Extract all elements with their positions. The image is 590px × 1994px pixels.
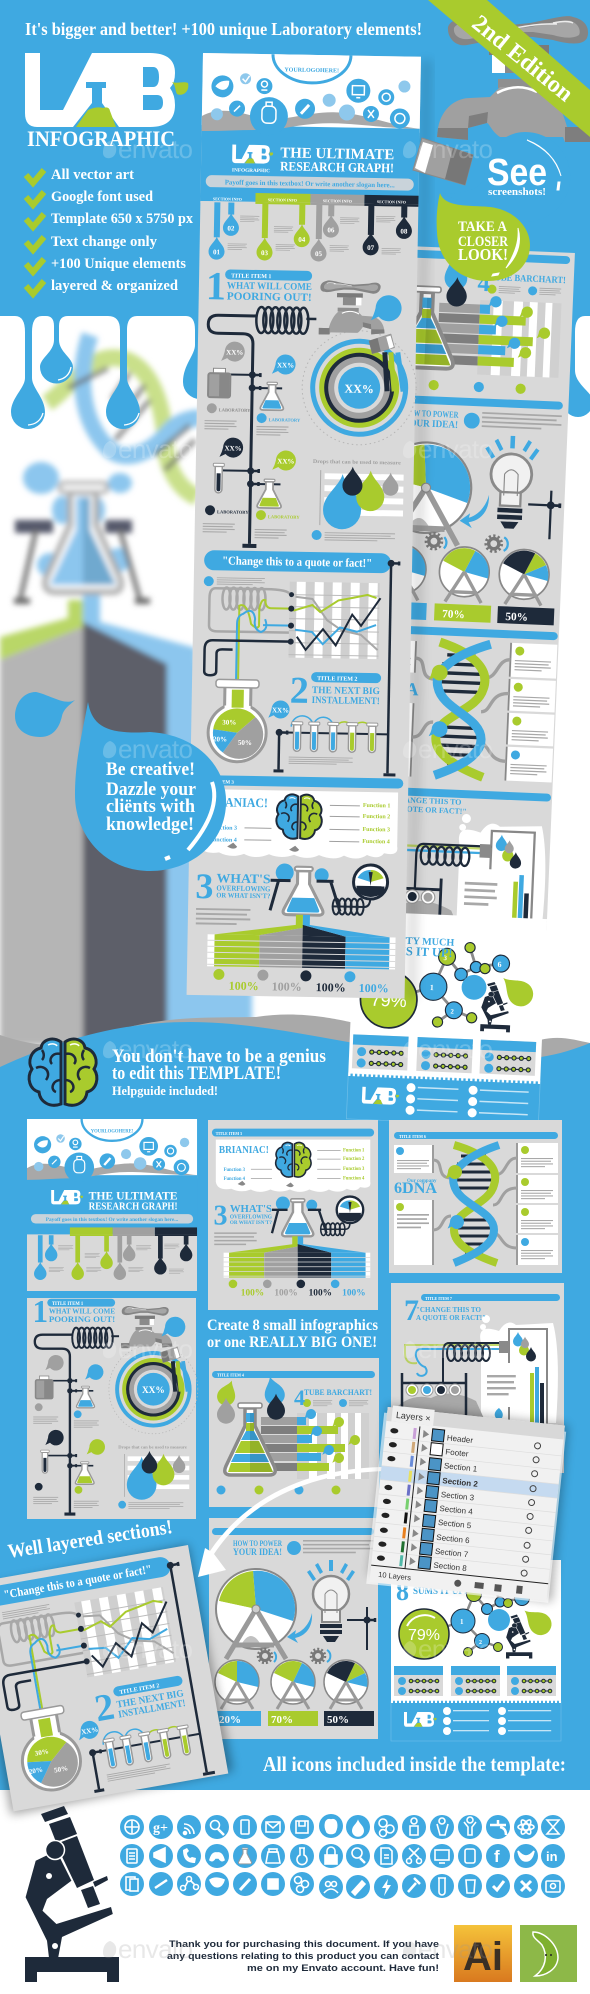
section 5 power your idea: 70% xyxy=(442,608,465,621)
poster section 1: POORING OUT! xyxy=(227,290,312,304)
well layered rotated panel xyxy=(0,1545,228,1811)
create 8 small infographics caption: Create 8 small infographics xyxy=(207,1317,378,1334)
poster section 1 xyxy=(201,263,418,551)
small panel: section 3: Function 4 xyxy=(343,1176,365,1181)
curved white arrow xyxy=(198,1467,385,1577)
small panel: section 3: Function 3 xyxy=(224,1168,246,1173)
poster header section: SECTION INFO xyxy=(377,199,406,205)
infographic wordmark: INFOGRAPHIC xyxy=(27,126,175,151)
genius message: to edit this TEMPLATE! xyxy=(112,1063,281,1084)
poster section 3: Function 3 xyxy=(209,825,237,832)
green 2nd edition ribbon xyxy=(428,0,590,137)
create 8 small infographics caption xyxy=(207,1317,378,1351)
poster section 2: 2 xyxy=(290,670,309,712)
small panel: section 4: 4 xyxy=(294,1385,305,1410)
layer expand triangles xyxy=(409,1430,430,1566)
section 5 power your idea xyxy=(371,394,564,625)
drop label xyxy=(458,219,508,264)
layers count: 10 Layers xyxy=(378,1570,412,1582)
layers tab: Layers × xyxy=(395,1410,431,1423)
poster section 1: LABORATORY xyxy=(217,509,249,515)
poster header section: 01 xyxy=(213,248,221,256)
small panel: section 5: 70% xyxy=(271,1714,293,1726)
creative text: cliënts with xyxy=(106,796,195,817)
envato watermarks on white: envato xyxy=(418,1934,493,1964)
poster section 1: XX% xyxy=(344,382,374,396)
feature list: Google font used xyxy=(51,189,154,205)
poster section 1: LABORATORY xyxy=(268,514,300,520)
well layered rotated panel: 2 xyxy=(92,1686,118,1730)
small panel: section 8: SUMS IT UP! xyxy=(413,1586,467,1596)
section 8 sums it up: PRETTY MUCH xyxy=(379,935,455,949)
small panel: section 5: HOW TO POWER xyxy=(233,1539,282,1548)
small panel: section 3: BRIANIAC! xyxy=(219,1145,269,1156)
poster section 2: 20% xyxy=(213,735,227,744)
gray wave behind blue section xyxy=(0,1015,590,1100)
small panel: section 3 xyxy=(208,1120,378,1310)
envato watermarks on white: envato xyxy=(118,1934,193,1964)
thank you note xyxy=(167,1939,440,1974)
poster section 3: Function 3 xyxy=(362,827,390,833)
feature list: Template 650 x 5750 px xyxy=(51,211,193,227)
section 8 sums it up xyxy=(346,915,547,1127)
thank you note: any questions relating to this product you can contact xyxy=(167,1951,440,1962)
poster section 1: LABORATORY xyxy=(269,417,301,423)
selected row xyxy=(380,1466,559,1498)
poster section 2: XX% xyxy=(272,706,289,715)
layer names: Section 4 xyxy=(439,1504,474,1516)
section 4 tube barchart: 4 xyxy=(477,270,491,297)
poster section 1: Drops that can be used to measure xyxy=(313,459,402,467)
icon glyphs: in xyxy=(546,1849,558,1864)
poster section 3: Function 4 xyxy=(362,839,390,845)
well layered heading: Well layered sections! xyxy=(6,1516,174,1563)
small panel: section 3: Function 3 xyxy=(343,1167,365,1172)
screenshots label: screenshots! xyxy=(488,187,546,198)
poster header section: 06 xyxy=(327,226,335,234)
layer names: Section 5 xyxy=(438,1518,472,1530)
small blue splash drop xyxy=(15,692,75,737)
large faucet xyxy=(437,16,590,142)
well layered rotated panel: 20% xyxy=(28,1766,43,1776)
layer names: Footer xyxy=(445,1447,469,1459)
poster 2 sheet xyxy=(355,245,575,930)
envato watermarks: envato xyxy=(118,1034,193,1064)
poster header section: 03 xyxy=(261,249,269,257)
poster section 3: BRIANIAC! xyxy=(204,794,268,810)
poster 1 sheet xyxy=(187,53,421,999)
poster header section: SECTION INFO xyxy=(323,198,352,204)
large brain icon xyxy=(29,1039,97,1105)
small panel: header: RESEARCH GRAPH! xyxy=(89,1201,178,1212)
feature list: layered & organized xyxy=(51,278,179,294)
section 4 tube barchart: TUBE BARCHART! xyxy=(489,272,566,286)
poster section 3: 3 xyxy=(195,866,214,906)
small panel: section 1: TITLE ITEM 1 xyxy=(52,1302,84,1307)
LAB logo xyxy=(25,53,188,127)
layer color strips xyxy=(399,1428,417,1566)
envato watermarks: envato xyxy=(418,734,493,764)
take a closer look green drop xyxy=(437,193,530,281)
poster header section: THE ULTIMATE xyxy=(280,145,394,163)
poster header section: 04 xyxy=(298,236,306,244)
see screenshots bubble xyxy=(443,132,570,222)
feature list: All vector art xyxy=(51,167,134,183)
small panel: section 3: Function 1 xyxy=(343,1148,365,1153)
feature list: +100 Unique elements xyxy=(51,256,186,272)
section 6 DNA: 6DNA xyxy=(370,677,419,699)
layer names xyxy=(433,1433,483,1573)
drop highlight xyxy=(165,782,214,859)
layers tab xyxy=(391,1406,435,1426)
creative text: Dazzle your xyxy=(106,779,197,800)
layers panel shadow xyxy=(369,1405,568,1602)
icon glyphs: g+ xyxy=(153,1821,168,1836)
small panel: section 4: TITLE ITEM 4 xyxy=(217,1372,244,1378)
drop highlight xyxy=(492,228,520,276)
poster section 2: 30% xyxy=(222,718,236,727)
small panel: section 5: YOUR IDEA! xyxy=(233,1547,282,1557)
layer thumbnails xyxy=(418,1429,445,1569)
small panel: section 8: 1 xyxy=(460,1618,464,1626)
genius message: Helpguide included! xyxy=(112,1083,218,1098)
poster section 2 xyxy=(200,550,399,776)
section 5 power your idea: HOW TO POWER xyxy=(403,407,459,420)
poster section 3: 100% xyxy=(229,979,259,993)
well layered rotated panel: 30% xyxy=(34,1747,49,1758)
small panel: section 3: OR WHAT ISN'T? xyxy=(230,1220,272,1226)
poster header section xyxy=(199,53,421,263)
feature list: Text change only xyxy=(51,234,157,250)
well layered rotated panel: 50% xyxy=(53,1764,69,1775)
envato watermarks: envato xyxy=(118,134,193,164)
poster header section: 02 xyxy=(227,224,235,233)
poster section 3: 100% xyxy=(359,981,389,995)
layer names: Header xyxy=(446,1433,474,1445)
poster section 3: 100% xyxy=(272,979,302,994)
Adobe Illustrator badge xyxy=(454,1925,512,1982)
layer names: Section 3 xyxy=(440,1490,475,1503)
small panel: section 8: 2 xyxy=(479,1640,482,1646)
creative text: knowledge! xyxy=(106,814,194,835)
thank you note: Thank you for purchasing this document. If you have xyxy=(169,1939,439,1950)
icon glyphs xyxy=(125,1817,560,1896)
small panel: section 7 xyxy=(391,1283,564,1473)
poster section 3: Function 4 xyxy=(209,837,237,844)
blue wave section background xyxy=(0,1022,590,1790)
drop label: TAKE A xyxy=(458,219,507,235)
poster section 1: WHAT WILL COME xyxy=(227,280,312,293)
envato watermarks xyxy=(103,134,493,1664)
bubble highlight xyxy=(527,140,561,190)
poster section 1: XX% xyxy=(226,348,243,357)
small panel: section 6 DNA: 6DNA xyxy=(394,1180,437,1197)
well layered rotated panel: TITLE ITEM 2 xyxy=(119,1683,160,1696)
banana mascot badge xyxy=(520,1925,577,1982)
blue top background with drips xyxy=(0,0,590,429)
section 7 quote: A QUOTE OR FACT!" xyxy=(387,804,467,816)
small panel: section 6 DNA: Our company xyxy=(407,1179,437,1184)
section 7 quote xyxy=(360,786,551,946)
creative text xyxy=(106,759,197,835)
faucet spout tip xyxy=(413,138,473,185)
poster 2 behind xyxy=(346,245,575,1127)
small panel: section 3: Function 2 xyxy=(343,1157,365,1162)
section 8 sums it up: 2 xyxy=(450,1009,455,1016)
poster section 2: THE NEXT BIG xyxy=(312,685,380,697)
small panel: section 3: WHAT'S xyxy=(230,1204,272,1215)
poster 1 shadow xyxy=(406,60,432,1000)
small panel: section 3: TITLE ITEM 3 xyxy=(216,1132,242,1136)
small panel: section 8 xyxy=(391,1560,561,1741)
well layered rotated panel: XX% xyxy=(81,1725,99,1736)
poster section 3: Function 2 xyxy=(363,814,390,820)
layers panel xyxy=(366,1405,567,1603)
small panel: section 5: 50% xyxy=(327,1714,349,1726)
section 5 power your idea: YOUR IDEA! xyxy=(402,418,458,431)
envato watermarks: envato xyxy=(118,434,193,464)
layer toolbar buttons xyxy=(454,1579,523,1594)
small panel: section 3: 100% xyxy=(241,1289,264,1299)
small panel: section 3: OVERFLOWING xyxy=(230,1214,272,1220)
envato watermarks: envato xyxy=(118,1334,193,1364)
white bottom section xyxy=(0,1790,590,1994)
small panel: section 1: 1 xyxy=(32,1294,48,1329)
small panel: section 7: TITLE ITEM 7 xyxy=(425,1296,452,1301)
poster header section: SECTION INFO xyxy=(268,197,297,203)
poster header section: 05 xyxy=(315,250,323,258)
envato watermarks: envato xyxy=(418,134,493,164)
small panel: section 1: XX% xyxy=(142,1386,165,1396)
genius message xyxy=(112,1046,326,1098)
blurred laboratory background scene xyxy=(0,335,252,1045)
small panel: section 4: TUBE BARCHART! xyxy=(304,1387,372,1397)
poster section 3: OR WHAT ISN'T? xyxy=(216,891,271,900)
poster section 3: OVERFLOWING xyxy=(216,883,271,893)
envato watermarks: envato xyxy=(418,1034,493,1064)
microscope icon xyxy=(25,1806,119,1982)
genius message: You don't have to be a genius xyxy=(112,1046,326,1067)
layer names: Section 7 xyxy=(435,1547,469,1559)
small panel: header: YOURLOGOHERE! xyxy=(91,1129,134,1134)
poster section 3: Function 1 xyxy=(363,803,390,809)
see label: See xyxy=(487,152,547,194)
poster section 2: INSTALLMENT! xyxy=(312,695,380,707)
envato watermarks on white xyxy=(103,1934,493,1964)
section 7 quote: "CHANGE THIS TO xyxy=(388,795,462,807)
layer names: Section 8 xyxy=(433,1561,468,1573)
thank you note: me on my Envato account. Have fun! xyxy=(247,1963,439,1974)
section 6 DNA xyxy=(366,625,558,783)
poster section 1: XX% xyxy=(224,444,242,453)
poster section 1: XX% xyxy=(277,361,294,370)
poster section 3 xyxy=(192,775,403,996)
section 5 power your idea: 20% xyxy=(383,606,406,619)
create 8 small infographics caption: or one REALLY BIG ONE! xyxy=(207,1334,377,1351)
section 7 quote: 7 xyxy=(377,788,395,825)
section 8 sums it up: 3 xyxy=(443,955,448,962)
small panel: section 8: 8 xyxy=(396,1577,409,1606)
poster header section: YOURLOGOHERE! xyxy=(284,67,339,74)
poster section 1: LABORATORY xyxy=(219,407,251,413)
layer names: Section 2 xyxy=(442,1476,479,1489)
section 8 sums it up: 79% xyxy=(370,990,407,1011)
small panel: section 8: 79% xyxy=(408,1627,440,1644)
small panel: section 5: 20% xyxy=(219,1714,241,1726)
poster header section: SECTION INFO xyxy=(213,196,242,202)
drop label: CLOSER xyxy=(458,234,508,250)
small panel: section 3: 3 xyxy=(213,1201,227,1232)
poster header section: Payoff goes in this textbox! Or write another slogan here... xyxy=(225,178,395,189)
envato watermarks: envato xyxy=(418,434,493,464)
ribbon label: 2nd Edition xyxy=(467,10,578,107)
poster section 1: XX% xyxy=(277,457,295,466)
well layered rotated panel: THE NEXT BIG xyxy=(116,1688,185,1711)
small panel: section 3: Function 4 xyxy=(224,1177,246,1182)
poster header section: RESEARCH GRAPH! xyxy=(280,158,394,175)
poster section 2: 50% xyxy=(238,739,252,747)
well layered rotated panel: INSTALLMENT! xyxy=(118,1698,186,1721)
small panel: section 3: 100% xyxy=(309,1289,332,1299)
Adobe Illustrator badge: Ai xyxy=(463,1935,503,1979)
section 8 top strip xyxy=(354,911,547,935)
small panel: section 1: Drops that can be used to measure xyxy=(118,1445,187,1450)
poster section 3: WHAT'S xyxy=(216,870,271,886)
section 8 sums it up: SUMS IT UP! xyxy=(378,943,453,960)
layer eye icons xyxy=(377,1428,399,1561)
icon grid xyxy=(120,1814,565,1899)
small panel: section 1 xyxy=(27,1294,198,1519)
poster section 2: TITLE ITEM 2 xyxy=(317,676,357,683)
section 8 sums it up: 6 xyxy=(497,960,502,969)
poster section 3: TITLE ITEM 3 xyxy=(200,780,234,786)
small panel: section 3: 100% xyxy=(274,1289,298,1299)
creative text: Be creative! xyxy=(106,759,195,780)
section 4 tube barchart xyxy=(380,249,570,396)
drop highlights xyxy=(28,367,139,425)
envato watermarks: envato xyxy=(418,1334,493,1364)
small panel: section 7: 7 xyxy=(404,1294,419,1327)
small panel: section 6 DNA: TITLE ITEM 6 xyxy=(399,1134,426,1139)
poster header section: INFOGRAPHIC xyxy=(232,169,270,174)
icon glyphs: f xyxy=(494,1847,500,1866)
small panel: section 6 DNA xyxy=(389,1120,562,1273)
section 5 power your idea: 50% xyxy=(505,611,528,624)
be creative blue drop xyxy=(75,702,226,871)
small panel: section 7: A QUOTE OR FACT!" xyxy=(416,1313,486,1322)
feature list xyxy=(26,167,193,294)
small panel: section 1: POORING OUT! xyxy=(49,1314,115,1324)
top headline: It's bigger and better! +100 unique Laboratory elements! xyxy=(25,19,422,39)
small panel: section 4 xyxy=(209,1358,379,1507)
small panel: section 5 xyxy=(209,1518,378,1739)
small panel: section 3: 100% xyxy=(342,1289,366,1299)
poster section 2: "Change this to a quote or fact!" xyxy=(222,553,372,570)
drop label: LOOK! xyxy=(458,245,508,264)
poster section 3: 100% xyxy=(316,980,346,995)
layer names: Section 6 xyxy=(436,1533,471,1545)
small panel: section 1: WHAT WILL COME xyxy=(49,1307,115,1316)
poster section 1: 1 xyxy=(206,263,226,308)
well layered panel shadow xyxy=(0,1545,233,1815)
layer names: Section 1 xyxy=(443,1461,478,1474)
well layered rotated panel: "Change this to a quote or fact!" xyxy=(3,1562,153,1602)
envato watermarks: envato xyxy=(118,1634,193,1664)
envato watermarks: envato xyxy=(418,1634,493,1664)
small panel: header xyxy=(27,1119,197,1291)
small panel: header: Payoff goes in this textbox! Or write another slogan here... xyxy=(46,1217,179,1223)
poster header section: 08 xyxy=(400,227,408,236)
section 8 sums it up: 1 xyxy=(430,983,434,992)
poster header section: 07 xyxy=(367,244,375,252)
poster 1 xyxy=(187,53,422,999)
small panel: header: THE ULTIMATE xyxy=(89,1189,178,1202)
small panel: section 7: "CHANGE THIS TO xyxy=(416,1305,481,1314)
layer target circles xyxy=(521,1443,541,1576)
envato watermarks: envato xyxy=(118,734,193,764)
poster section 1: TITLE ITEM 1 xyxy=(231,274,272,280)
